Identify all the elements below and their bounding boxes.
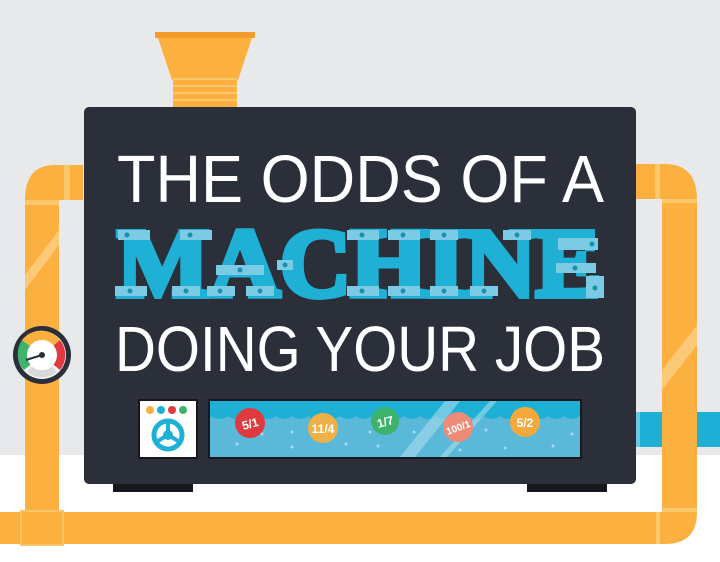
odds screen (208, 399, 582, 459)
ball 1/7 (371, 407, 399, 435)
right pipe system (0, 164, 697, 546)
ball 100/1 (443, 412, 473, 442)
control panel (138, 399, 198, 459)
left pipe system (25, 165, 83, 528)
ball 5/2: 5/2 (517, 416, 534, 430)
machine feet (113, 482, 607, 492)
ball 11/4 (308, 413, 338, 443)
ball 5/1 (235, 408, 265, 438)
machine body (84, 107, 636, 484)
ball 1/7: 1/7 (375, 413, 395, 431)
gauge (13, 326, 71, 384)
title line 3: DOING YOUR JOB (115, 313, 605, 385)
blue pipe right (630, 412, 720, 447)
funnel top (155, 32, 255, 110)
title line 1: THE ODDS OF A (117, 142, 604, 217)
ball 11/4: 11/4 (312, 422, 335, 436)
ball 5/2 (510, 407, 540, 437)
ball 5/1: 5/1 (240, 415, 260, 433)
ball 100/1: 100/1 (445, 419, 473, 438)
title line 2: MACHINE: MACHINE (117, 210, 601, 318)
